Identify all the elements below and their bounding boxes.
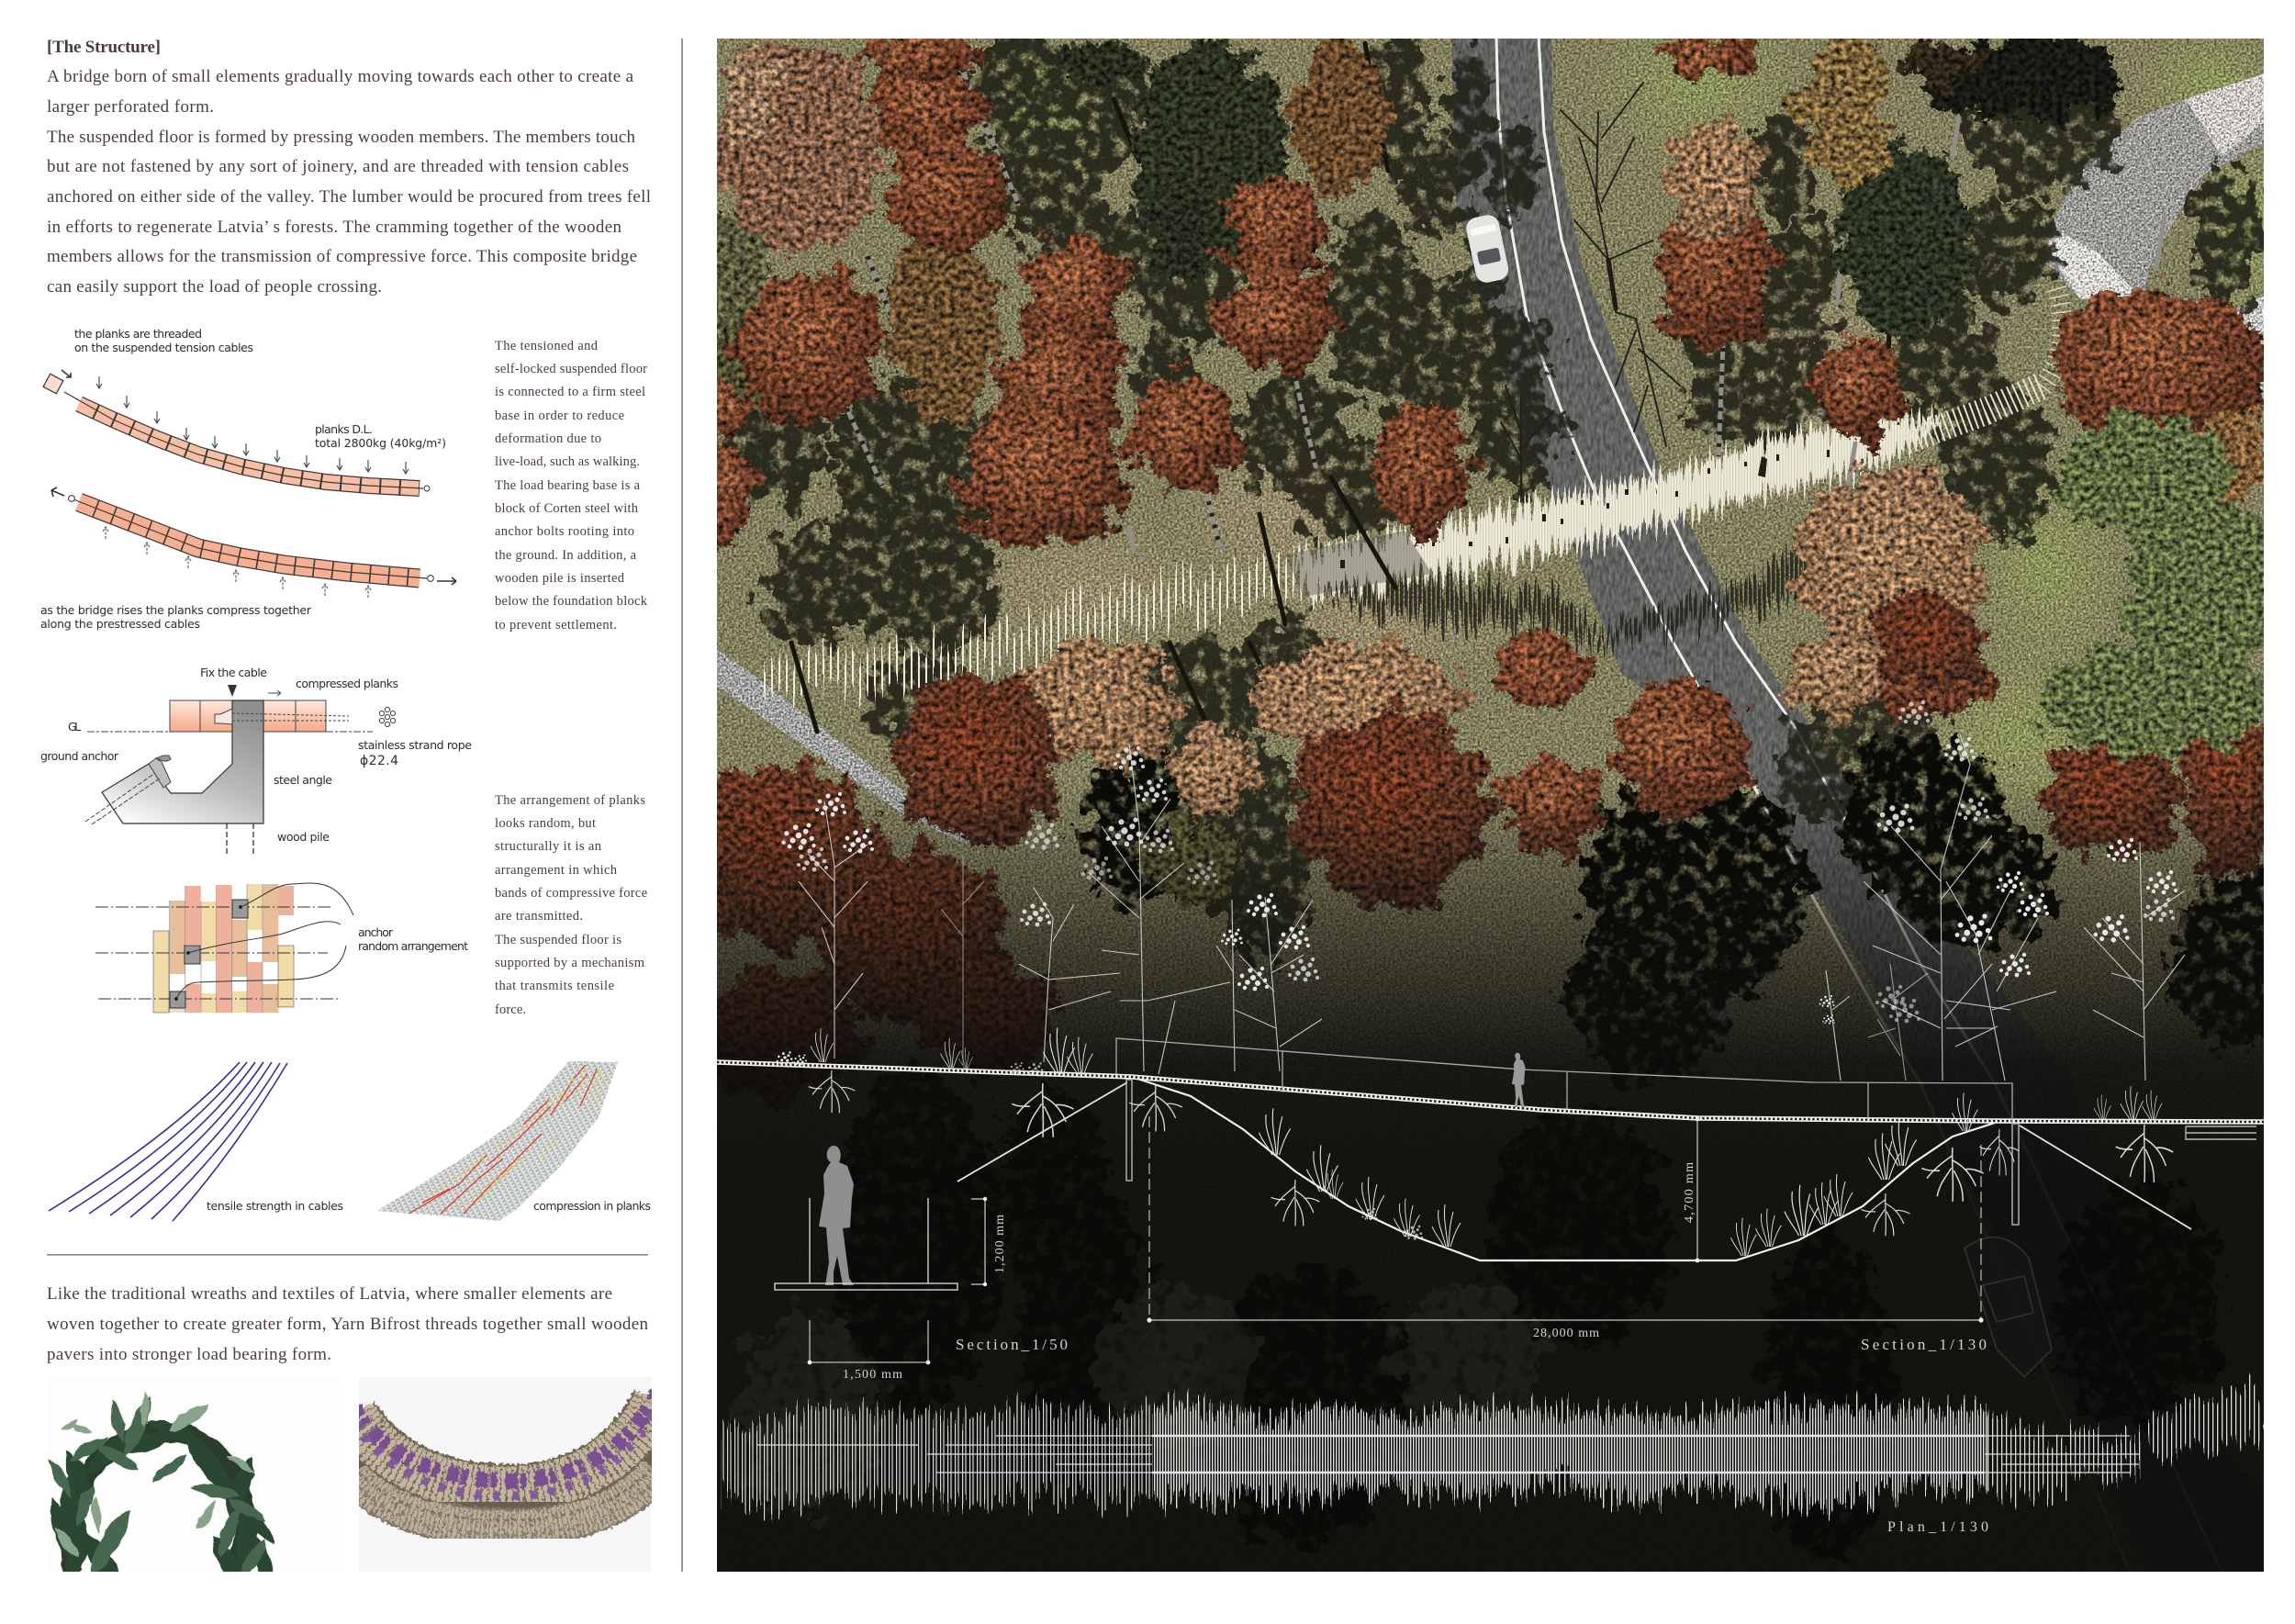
text block: tensioned floor: below the foundation block <box>495 594 648 609</box>
text block: arrangement of planks: force. <box>495 1002 526 1017</box>
asphalt <box>1451 37 2295 1572</box>
railing <box>1116 1038 2012 1124</box>
text block: tensioned floor: live-load, such as walking. <box>495 454 640 469</box>
text block: the structure: can easily support the load of people crossing. <box>47 277 382 297</box>
plank colours <box>153 884 294 1013</box>
foundation labels: steel angle <box>274 773 332 787</box>
plan label: Plan_1/130 <box>1887 1519 1988 1535</box>
cables and anchors <box>95 883 353 1013</box>
section 1/50 label: Section_1/50 <box>956 1336 1068 1353</box>
red-brown trees <box>699 32 2268 851</box>
anchor lines <box>957 1082 2191 1229</box>
sparse planks east <box>1906 283 2063 441</box>
rope backing <box>359 1450 652 1509</box>
foundation labels <box>40 666 472 844</box>
steel base <box>102 700 263 823</box>
wreath foliage <box>48 1392 274 1572</box>
tree i <box>2084 842 2185 1081</box>
text block: the structure: A bridge born of small elements gradually moving towards each other to create a <box>47 67 634 86</box>
sketch labels top <box>40 327 446 631</box>
arrangement labels: anchor <box>358 925 394 939</box>
section roots <box>809 1070 2173 1236</box>
dark green trees <box>1132 37 1288 266</box>
sparse planks west <box>759 555 1308 695</box>
platform and rails <box>775 1198 957 1290</box>
lift arrows <box>103 527 371 598</box>
line trees overlay <box>799 734 2185 1081</box>
text block: tensioned floor: deformation due to <box>495 431 601 446</box>
section 1/130 label: Section_1/130 <box>1861 1336 1987 1353</box>
valley terrain <box>1137 1079 1995 1260</box>
foundation labels: ground anchor <box>40 749 119 763</box>
main aerial image <box>680 0 2295 1572</box>
1,500 dimension <box>808 1320 930 1382</box>
photo: textile braid <box>353 1377 656 1572</box>
tree j <box>1826 970 1850 1081</box>
lower plank chain <box>51 487 456 585</box>
plan cables <box>757 1436 2139 1473</box>
tree g <box>1864 734 2010 1081</box>
tree a <box>799 801 868 1058</box>
ground and deck chain <box>717 1062 2264 1122</box>
force lines <box>409 1065 597 1214</box>
tree e <box>1235 897 1322 1071</box>
lower brown trees <box>680 597 2276 1102</box>
lower rope <box>353 1462 656 1535</box>
text block: arrangement of planks: bands of compressive force <box>495 886 647 901</box>
tree d <box>1088 744 1230 1074</box>
shaded deck section <box>1285 531 1432 597</box>
section ground and deck <box>717 1027 2264 1260</box>
upper plank chain <box>43 370 430 491</box>
foundation labels: GL <box>68 720 81 734</box>
1,200 dimension <box>971 1197 1007 1286</box>
bridge shadow <box>1308 484 1864 647</box>
olive-brown trees <box>888 226 998 419</box>
text block: arrangement of planks: looks random, but <box>495 816 596 831</box>
text block: arrangement of planks: arrangement in which <box>495 863 618 878</box>
diagram: compression in planks <box>377 1061 651 1221</box>
piles <box>1126 1080 2256 1225</box>
section tufts <box>811 1027 2162 1256</box>
flower clusters <box>781 700 2177 1025</box>
trunks <box>791 43 2165 732</box>
photo: wreath <box>48 1392 274 1572</box>
sketch labels top: along the prestressed cables <box>40 617 200 631</box>
sketch labels top: as the bridge rises the planks compress together <box>40 603 312 617</box>
plank field <box>377 1061 618 1221</box>
text block: arrangement of planks: The arrangement of planks <box>495 793 645 808</box>
tree shadows <box>722 28 2261 960</box>
4,700 dimension: 4,700 mm <box>1683 1162 1696 1223</box>
text block: tensioned floor <box>495 339 648 633</box>
cable curves <box>49 1062 287 1221</box>
green-olive trees <box>1144 414 2286 904</box>
sketch: foundation detail <box>40 666 472 854</box>
anchor and cables <box>85 690 396 854</box>
planks around post <box>170 700 326 732</box>
load arrows <box>96 376 409 474</box>
arrangement labels <box>358 925 468 953</box>
foundation labels: stainless strand rope <box>358 738 472 752</box>
upper braid <box>353 1394 656 1496</box>
arrangement labels: random arrangement <box>358 939 468 953</box>
tree h <box>1946 881 2056 1081</box>
text block: tensioned floor: The load bearing base is a <box>495 478 641 493</box>
dense planks <box>1292 415 1947 593</box>
text block: the structure: larger perforated form. <box>47 97 214 117</box>
diagram: tensile strength in cables <box>49 1062 343 1221</box>
standing figure <box>819 1146 854 1285</box>
tree f <box>1216 900 1235 1071</box>
dark fade overlay <box>717 780 2264 1572</box>
tree k <box>1868 964 1928 1081</box>
plan planks <box>721 1377 2264 1524</box>
tree c <box>1019 888 1120 1062</box>
text block: arrangement of planks: are transmitted. <box>495 909 583 924</box>
text block: tensioned floor: block of Corten steel with <box>495 501 639 516</box>
compression caption: compression in planks <box>533 1199 651 1213</box>
faint road and car at bottom <box>1965 1238 2052 1377</box>
text block: arrangement of planks: structurally it is an <box>495 839 602 854</box>
text block: wreaths and textiles: pavers into stronger load bearing form. <box>47 1345 331 1364</box>
road <box>1451 37 2295 1572</box>
4,700 dimension <box>1683 1117 1699 1262</box>
1,200 dimension: 1,200 mm <box>993 1215 1007 1273</box>
sketch labels top: the planks are threaded <box>74 327 202 341</box>
foundation labels: compressed planks <box>296 677 398 690</box>
person on deck <box>1512 1053 1526 1107</box>
text block: tensioned floor: The tensioned and <box>495 339 599 353</box>
text block: arrangement of planks: The suspended floor is <box>495 933 621 947</box>
text block: wreaths and textiles: woven together to create greater form, Yarn Bifrost threads together small wooden <box>47 1315 648 1334</box>
car <box>1464 213 1510 285</box>
text block: wreaths and textiles: Like the traditional wreaths and textiles of Latvia, where smaller elements are <box>47 1284 612 1304</box>
text block: the structure: anchored on either side of the valley. The lumber would be procured from trees fell <box>47 187 651 207</box>
sketch labels top: total 2800kg (40kg/m²) <box>315 436 446 450</box>
text block: wreaths and textiles <box>47 1284 648 1364</box>
text block: arrangement of planks <box>495 793 647 1017</box>
tan and pale trees <box>1008 122 1987 817</box>
bridge plan on landscape <box>759 283 2063 695</box>
birch trunks <box>842 47 2165 551</box>
foundation labels: Fix the cable <box>200 666 267 679</box>
text block: the structure <box>47 38 651 297</box>
light upper-left tree <box>716 39 878 256</box>
deck perforations <box>1340 450 1830 568</box>
text block: tensioned floor: to prevent settlement. <box>495 618 617 633</box>
grass ground <box>717 0 2295 1572</box>
ground shrubs <box>777 1051 1423 1240</box>
dark shadow trees <box>1083 734 2295 1083</box>
tree b <box>941 857 984 1065</box>
sketch labels top: planks D.L. <box>315 422 373 436</box>
text block: arrangement of planks: supported by a mechanism <box>495 956 645 970</box>
text block: the structure: members allows for the transmission of compressive force. This composite bridge <box>47 247 637 266</box>
text block: tensioned floor: anchor bolts rooting into <box>495 524 634 539</box>
text block: tensioned floor: self-locked suspended floor <box>495 362 647 376</box>
sketch labels top: on the suspended tension cables <box>74 341 253 354</box>
1,500 dimension: 1,500 mm <box>843 1368 902 1382</box>
text block: tensioned floor: is connected to a firm steel <box>495 385 645 399</box>
plan drawing <box>721 1377 2264 1524</box>
fix arrow <box>228 685 237 697</box>
text block: the structure: [The Structure] <box>47 38 161 57</box>
text block: arrangement of planks: that transmits tensile <box>495 979 614 993</box>
foundation labels: ϕ22.4 <box>360 754 398 768</box>
text block: tensioned floor: wooden pile is inserted <box>495 571 625 586</box>
lane lines <box>1496 37 2222 1572</box>
tree canopies <box>680 30 2286 1102</box>
text block: the structure: The suspended floor is formed by pressing wooden members. The members touch <box>47 128 635 147</box>
text block: tensioned floor: base in order to reduce <box>495 409 624 423</box>
paved paths <box>716 73 2267 845</box>
section 1/130 dimensions <box>1147 1116 1987 1353</box>
column divider <box>681 39 683 1572</box>
sketch: random plank arrangement <box>95 883 468 1013</box>
text block: tensioned floor: the ground. In addition, a <box>495 548 637 563</box>
sketch: planks threaded on cables <box>40 327 456 631</box>
olive trees <box>701 216 771 330</box>
horizontal divider <box>47 1254 648 1256</box>
text block: the structure: in efforts to regenerate Latvia’ s forests. The cramming together of the wooden <box>47 218 622 237</box>
28,000 dimension <box>1147 1116 1984 1340</box>
faint forest shapes at bottom <box>734 1065 2222 1561</box>
dark trunks and branch shadows <box>791 43 1890 732</box>
text block: the structure: but are not fastened by any sort of joinery, and are threaded with tension cables <box>47 157 629 176</box>
cable caption: tensile strength in cables <box>207 1199 343 1213</box>
section 1/50 detail <box>775 1146 1068 1382</box>
foundation labels: wood pile <box>277 830 330 844</box>
28,000 dimension: 28,000 mm <box>1533 1327 1599 1340</box>
